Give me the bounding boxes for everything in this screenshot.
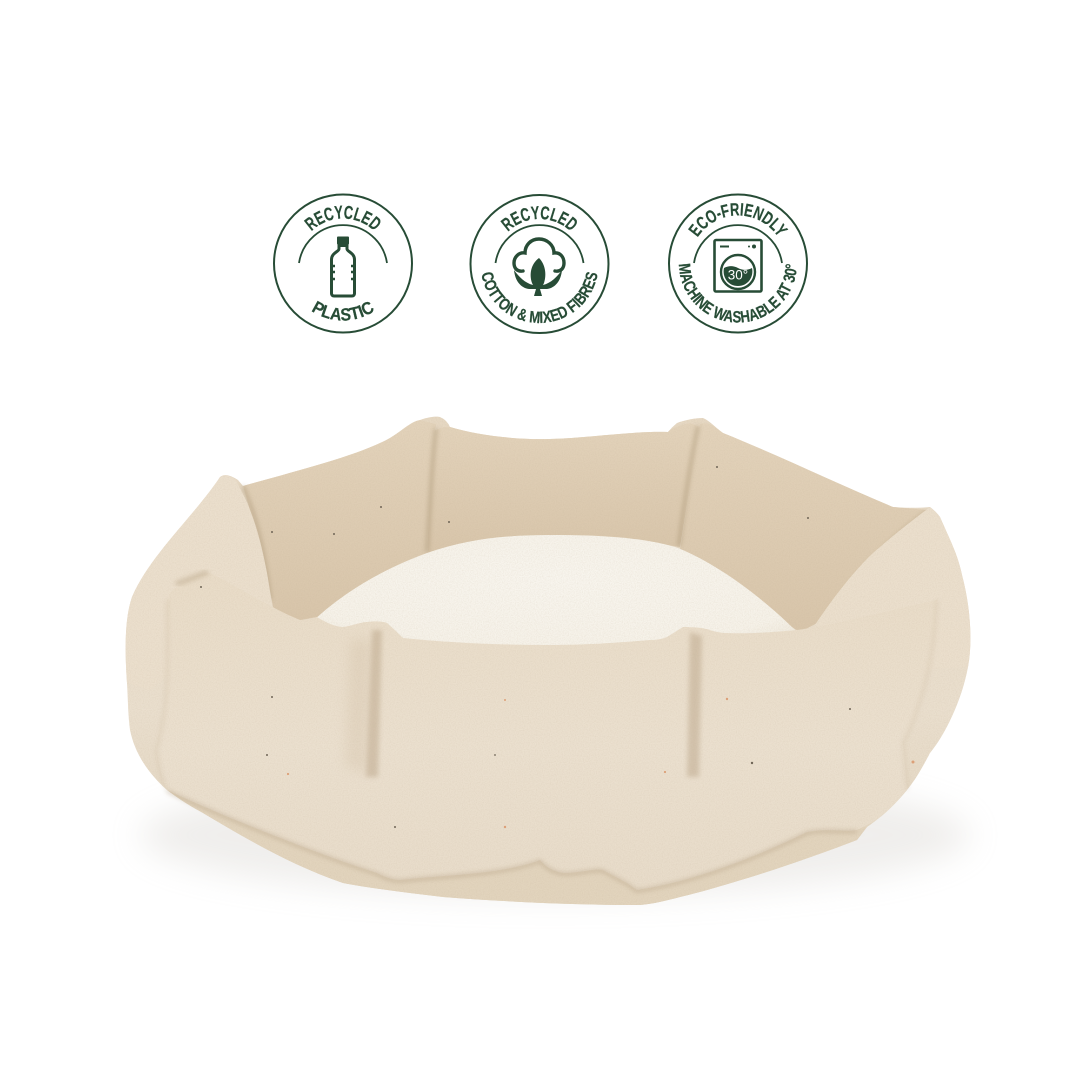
badge: recycled cotton and mixed fibres (470, 194, 610, 334)
badge: recycled plastic (273, 194, 413, 334)
label: recycled: RECYCLED (500, 206, 577, 232)
corner crease left (176, 572, 208, 584)
base roll (167, 790, 867, 905)
centre back wall (427, 423, 700, 556)
front pleat left (366, 630, 382, 777)
fleece cushion (312, 535, 797, 650)
outer shell (126, 417, 970, 905)
left back wall (243, 420, 436, 622)
right back wall (680, 423, 928, 632)
side seam shadow (157, 600, 937, 790)
icon: bottle (331, 236, 355, 296)
front pleat right (687, 632, 702, 777)
right corner gusset (815, 507, 970, 670)
label: plastic: PLASTIC (312, 300, 374, 321)
lower seam (167, 791, 857, 891)
badge: eco-friendly machine washable (668, 194, 808, 334)
label: machine washable at 30 degrees: MACHINE WASHABLE AT 30° (678, 264, 796, 323)
label: recycled: RECYCLED (304, 206, 380, 231)
fabric speckles (200, 466, 851, 828)
front pleat left soft shade (345, 640, 372, 775)
fold shadows (243, 426, 928, 622)
pet bed illustration (126, 417, 970, 905)
ground shadow (140, 773, 970, 897)
orange flecks (287, 698, 914, 828)
cloth weave texture (126, 417, 970, 905)
label: eco-friendly: ECO-FRIENDLY (688, 203, 788, 237)
icon: cotton boll (514, 239, 564, 296)
left corner gusset (126, 475, 273, 690)
label: 30 degrees: 30° (728, 268, 748, 282)
front wall (157, 573, 937, 890)
label: cotton and mixed fibres: COTTON & MIXED FIBRES (482, 272, 598, 324)
